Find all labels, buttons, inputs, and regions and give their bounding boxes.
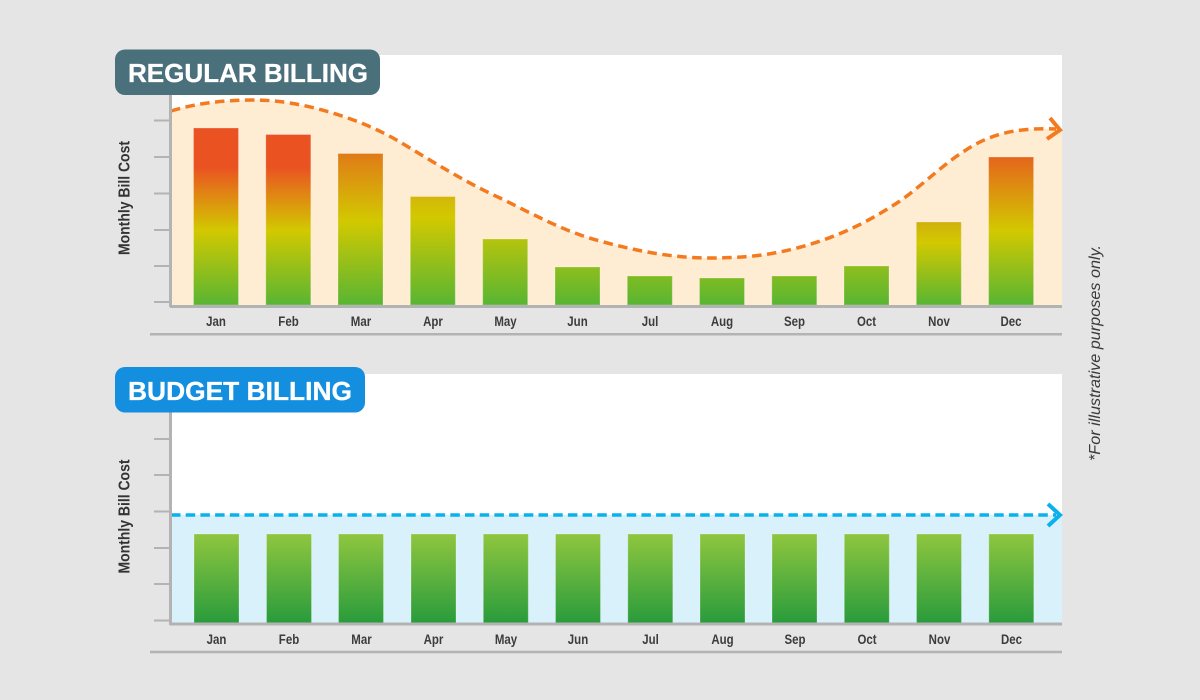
month labels: Feb <box>278 314 299 329</box>
heading: regular billing <box>115 50 380 95</box>
arrowhead: regular billing <box>1047 118 1060 139</box>
month labels: Oct <box>857 632 877 647</box>
month labels: Feb <box>279 632 300 647</box>
regular billing dashed trend line <box>171 100 1056 258</box>
month labels: Sep <box>784 632 806 647</box>
month labels: May <box>494 314 517 329</box>
month labels: Nov <box>929 632 950 647</box>
y axis label: Monthly Bill Cost <box>116 459 134 574</box>
month labels: Aug <box>711 632 734 647</box>
month labels: Jun <box>567 314 588 329</box>
month labels: Mar <box>351 632 372 647</box>
month labels: May <box>495 632 517 647</box>
month labels: Oct <box>857 314 877 329</box>
regular billing bars <box>194 128 1034 305</box>
y axis and ticks <box>169 410 172 625</box>
month labels <box>207 632 1022 647</box>
heading: regular billing: REGULAR BILLING <box>128 58 368 88</box>
month labels: Jan <box>207 632 226 647</box>
area under regular billing curve <box>171 100 1062 305</box>
month labels: Mar <box>351 314 371 329</box>
heading: budget billing: BUDGET BILLING <box>128 376 352 406</box>
month labels: Jul <box>642 632 659 647</box>
area under budget billing line <box>171 515 1062 623</box>
month labels: Jan <box>206 314 226 329</box>
month labels: Dec <box>1000 314 1022 329</box>
panel: regular billing chart <box>116 55 1062 334</box>
arrowhead: budget billing <box>1048 504 1060 526</box>
month labels: Dec <box>1001 632 1022 647</box>
budget billing dashed line <box>171 513 1056 517</box>
month labels: Apr <box>423 314 443 329</box>
heading: budget billing <box>115 367 365 412</box>
month labels: Jun <box>568 632 588 647</box>
budget billing bars <box>194 534 1034 623</box>
month labels <box>206 314 1022 329</box>
y axis and ticks <box>169 95 172 307</box>
month labels: Apr <box>424 632 443 647</box>
month labels: Sep <box>784 314 805 329</box>
month labels: Aug <box>711 314 733 329</box>
month labels: Nov <box>928 314 950 329</box>
panel: budget billing chart <box>116 374 1062 652</box>
month labels: Jul <box>642 314 658 329</box>
y axis label: Monthly Bill Cost <box>116 140 134 255</box>
footnote: *For illustrative purposes only. <box>1087 245 1104 461</box>
